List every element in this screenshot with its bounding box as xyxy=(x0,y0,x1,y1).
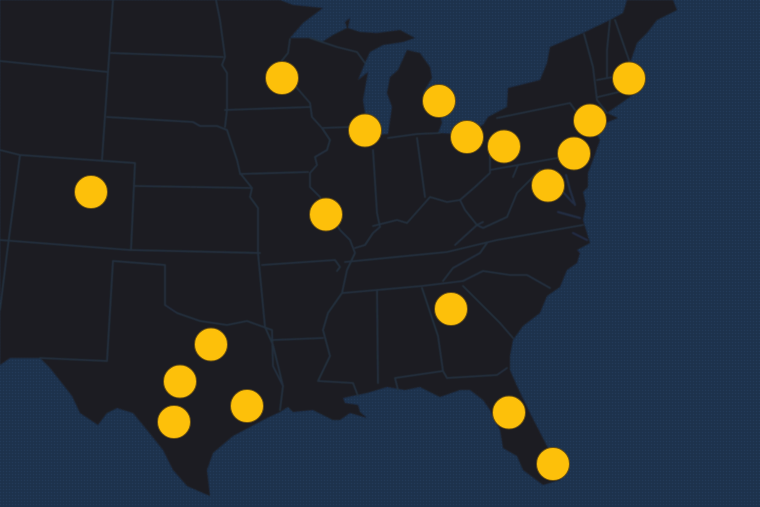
marker: Pittsburgh xyxy=(488,130,520,163)
marker: Missouri xyxy=(310,198,342,231)
marker: Boston xyxy=(612,62,646,95)
Chesapeake and Delaware bays xyxy=(558,175,587,240)
marker: Austin xyxy=(164,365,196,398)
marker: Illinois xyxy=(348,114,382,147)
marker: New York xyxy=(574,104,606,137)
state borders xyxy=(0,0,630,410)
marker: Georgia xyxy=(434,292,468,326)
marker: Dallas xyxy=(194,328,228,361)
marker: Washington xyxy=(532,169,564,202)
marker: Minnesota xyxy=(266,62,298,94)
location markers xyxy=(74,62,646,480)
marker: Tampa xyxy=(492,396,526,429)
marker: Ohio xyxy=(450,120,484,154)
marker: Colorado xyxy=(74,176,108,208)
marker: Michigan xyxy=(422,84,456,118)
marker: Houston xyxy=(230,390,264,422)
marker: Philadelphia xyxy=(558,137,590,170)
marker: Miami xyxy=(536,448,570,480)
marker: San Antonio xyxy=(158,406,190,438)
